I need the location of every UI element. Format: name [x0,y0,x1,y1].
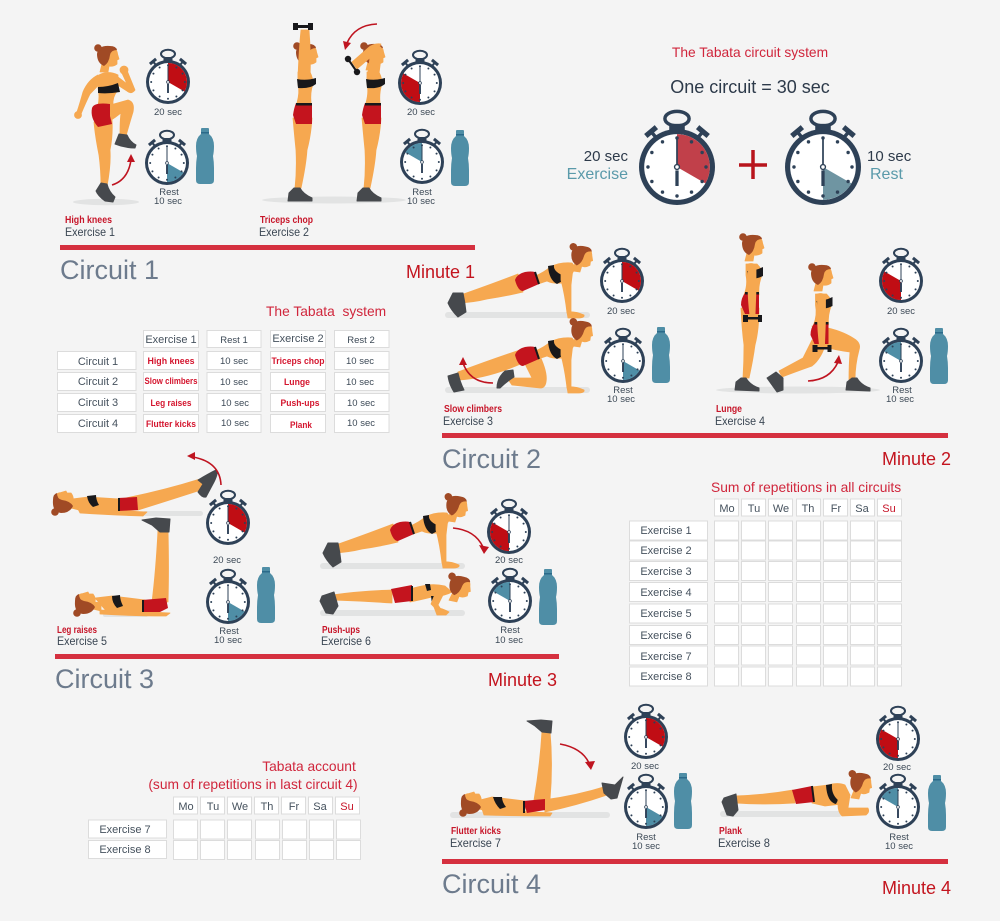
heading [148,759,358,792]
exercise 2: triceps chop [259,23,469,239]
exercise label: Triceps chop [260,214,313,226]
exercise label [443,403,502,428]
circuit 4 bar [442,859,948,864]
row 7 [630,646,902,665]
table text: Triceps chop [272,356,325,367]
stopwatch rest [785,111,912,205]
exercise label: Exercise 3 [443,414,493,428]
row 1: Exercise 1 [640,525,692,537]
exercise label [715,403,765,428]
stopwatch 20 sec: 20 sec [154,107,182,118]
table text: 10 sec [347,418,375,429]
row 3: Exercise 3 [640,566,692,578]
table text: Leg raises [150,398,192,409]
exercise label [321,624,371,648]
stopwatch 20 sec: 20 sec [407,107,435,118]
heading: Sum of repetitions in all circuits [711,480,901,495]
stopwatch exercise: 20 sec [584,148,628,165]
stopwatch 20 sec [879,249,923,317]
arrow [343,24,377,50]
stopwatch rest: Rest [412,187,432,198]
row 8 [630,667,902,686]
table text: 10 sec [220,356,248,367]
arrow [112,154,135,185]
exercise 8: plank [718,707,946,852]
stopwatch rest [624,775,668,852]
weekday header: We [232,801,248,813]
figure: push-ups [320,493,473,616]
panel: sum of repetitions table [630,480,902,686]
row 6: Exercise 6 [640,630,692,642]
stopwatch 20 sec [487,500,531,566]
stopwatch rest: Rest [613,385,633,396]
minute 2: Minute 2 [882,449,951,469]
heading: circuit 2: Circuit 2 [442,444,541,474]
exercise label: Exercise 8 [718,836,770,850]
minute 1: Minute 1 [406,262,475,282]
heading: Tabata account [262,759,356,774]
stopwatch 20 sec [876,707,920,773]
exercise label [57,624,107,648]
icon: water bottle [257,567,275,623]
subheading: One circuit = 30 sec [670,77,830,97]
table text: Exercise 2 [272,333,324,345]
row 5: Exercise 5 [640,608,692,620]
table text: Circuit 1 [78,356,118,368]
weekday header: We [773,503,789,515]
exercise label [259,214,313,239]
stopwatch exercise: Exercise [567,166,628,183]
table text: Circuit 2 [78,376,118,388]
exercise label: Exercise 6 [321,634,371,648]
exercise label: Lunge [716,403,742,415]
table text: Flutter kicks [146,419,196,430]
stopwatch rest: 10 sec [867,148,912,165]
exercise label: Plank [719,825,742,837]
exercise 4: lunge [715,233,948,428]
row 5 [630,604,902,623]
stopwatch rest: Rest [889,832,909,843]
stopwatch 20 sec [146,50,190,118]
stopwatch rest: 10 sec [407,196,435,207]
stopwatch 20 sec: 20 sec [213,555,241,566]
stopwatch 20 sec: 20 sec [883,762,911,773]
icon: water bottle [930,328,948,384]
weekday header: Sa [313,801,328,813]
figure: high knees [73,44,139,205]
exercise label: Slow climbers [444,403,502,415]
exercise label [65,214,115,239]
circuit 3 bar [55,654,559,659]
table text: 10 sec [346,356,374,367]
stopwatch rest [601,329,645,405]
stopwatch rest: 10 sec [607,394,635,405]
stopwatch 20 sec: 20 sec [495,555,523,566]
table text: 10 sec [347,398,375,409]
stopwatch 20 sec: 20 sec [631,761,659,772]
row 4: Exercise 4 [640,587,692,599]
weekday header [714,499,902,516]
weekday header: Th [802,503,814,515]
heading: The Tabata system [266,304,386,319]
stopwatch 20 sec [206,491,250,566]
stopwatch 20 sec: 20 sec [887,306,915,317]
row 2 [630,541,902,560]
exercise label: Leg raises [57,624,97,636]
icon: water bottle [539,569,557,625]
exercise label: Flutter kicks [451,825,501,837]
heading: circuit 1: Circuit 1 [60,255,159,285]
table text [78,333,375,431]
stopwatch rest: 10 sec [154,196,182,207]
figure: flutter kicks [450,720,623,818]
weekday header: Mo [719,503,735,515]
weekday header: Mo [178,801,194,813]
arrow [453,528,489,554]
heading: circuit 4: Circuit 4 [442,869,541,899]
table text: Circuit 3 [78,397,118,409]
stopwatch 20 sec [624,705,668,772]
heading: The Tabata circuit system [672,45,828,60]
exercise label [718,825,770,850]
icon: water bottle [674,773,692,829]
figure: triceps chop [262,23,406,204]
exercise 6: push-ups [320,493,557,648]
row 4 [630,582,902,602]
row exercise 8 [88,840,360,860]
icon: water bottle [196,128,214,184]
table text: 10 sec [221,398,249,409]
exercise 3: slow climbers [443,243,670,428]
table text: Lunge [284,377,310,388]
exercise 1: high knees [65,44,214,239]
table text: Push-ups [280,398,320,409]
icon: water bottle [652,327,670,383]
stopwatch rest: 10 sec [886,394,914,405]
stopwatch 20 sec [398,51,442,118]
weekday header: Tu [207,801,219,813]
table text: Exercise 1 [145,334,197,346]
weekday header: Fr [289,801,300,813]
row 8: Exercise 8 [640,671,692,683]
row 7: Exercise 7 [640,651,692,663]
stopwatch exercise [567,111,715,205]
panel: circuit system [567,45,912,205]
row 1 [630,521,902,540]
circuit 2 bar [442,433,948,438]
arrow [459,357,493,383]
row exercise 8: Exercise 8 [99,844,151,856]
figure: slow climbers [445,243,595,393]
stopwatch rest: 10 sec [214,635,242,646]
minute 3: Minute 3 [488,670,557,690]
exercise label: Exercise 5 [57,634,107,648]
panel: tabata account table [88,759,360,860]
figure: plank [720,770,874,817]
exercise label: Exercise 4 [715,414,765,428]
weekday header: Fr [831,503,842,515]
stopwatch rest [206,570,250,646]
table text: Rest 2 [347,335,375,346]
row 6 [630,626,902,644]
stopwatch rest: Rest [892,385,912,396]
table text: 10 sec [346,377,374,388]
exercise label: High knees [65,214,112,226]
figure: lunge [716,233,880,394]
arrow [808,355,842,381]
weekday header: Su [340,801,354,813]
table text: 10 sec [221,418,249,429]
stopwatch rest [879,329,923,405]
icon: water bottle [928,775,946,831]
table text: Rest 1 [220,335,248,346]
stopwatch 20 sec [600,249,644,317]
weekday header [174,797,360,814]
weekday header: Sa [855,503,870,515]
panel: tabata system table [58,304,389,432]
weekday header: Th [261,801,273,813]
stopwatch rest [145,131,189,207]
exercise label [450,825,501,850]
stopwatch rest [876,775,920,852]
table text: 10 sec [220,377,248,388]
arrow [187,452,221,485]
table cells [58,330,389,432]
exercise label: Exercise 1 [65,225,115,239]
stopwatch rest [400,130,444,207]
weekday header: Su [882,503,896,515]
table text: Slow climbers [144,376,198,387]
plus [739,150,767,179]
table text: Circuit 4 [78,418,118,430]
row 3 [630,562,902,580]
row 2: Exercise 2 [640,545,692,557]
arrow [560,744,595,770]
stopwatch rest: 10 sec [495,635,523,646]
table text: Plank [290,420,313,431]
exercise label: Push-ups [322,624,360,636]
stopwatch rest [488,569,532,646]
row exercise 7 [88,820,360,839]
exercise label: Exercise 7 [450,836,501,850]
row exercise 7: Exercise 7 [99,824,151,836]
stopwatch rest: Rest [500,625,520,636]
icon: water bottle [451,130,469,186]
weekday header: Tu [748,503,760,515]
stopwatch rest: Rest [870,166,903,183]
stopwatch rest: Rest [159,187,179,198]
exercise label: Exercise 2 [259,225,309,239]
figure: leg raises [51,470,217,617]
exercise 7: flutter kicks [450,705,692,852]
table text: High knees [148,356,194,367]
circuit 1 bar [60,245,475,250]
stopwatch 20 sec: 20 sec [607,306,635,317]
exercise 5: leg raises [51,452,275,648]
heading: (sum of repetitions in last circuit 4) [148,777,358,792]
stopwatch rest: Rest [219,626,239,637]
stopwatch rest: 10 sec [885,841,913,852]
minute 4: Minute 4 [882,878,951,898]
heading: circuit 3: Circuit 3 [55,664,154,694]
stopwatch rest: Rest [636,832,656,843]
stopwatch rest: 10 sec [632,841,660,852]
